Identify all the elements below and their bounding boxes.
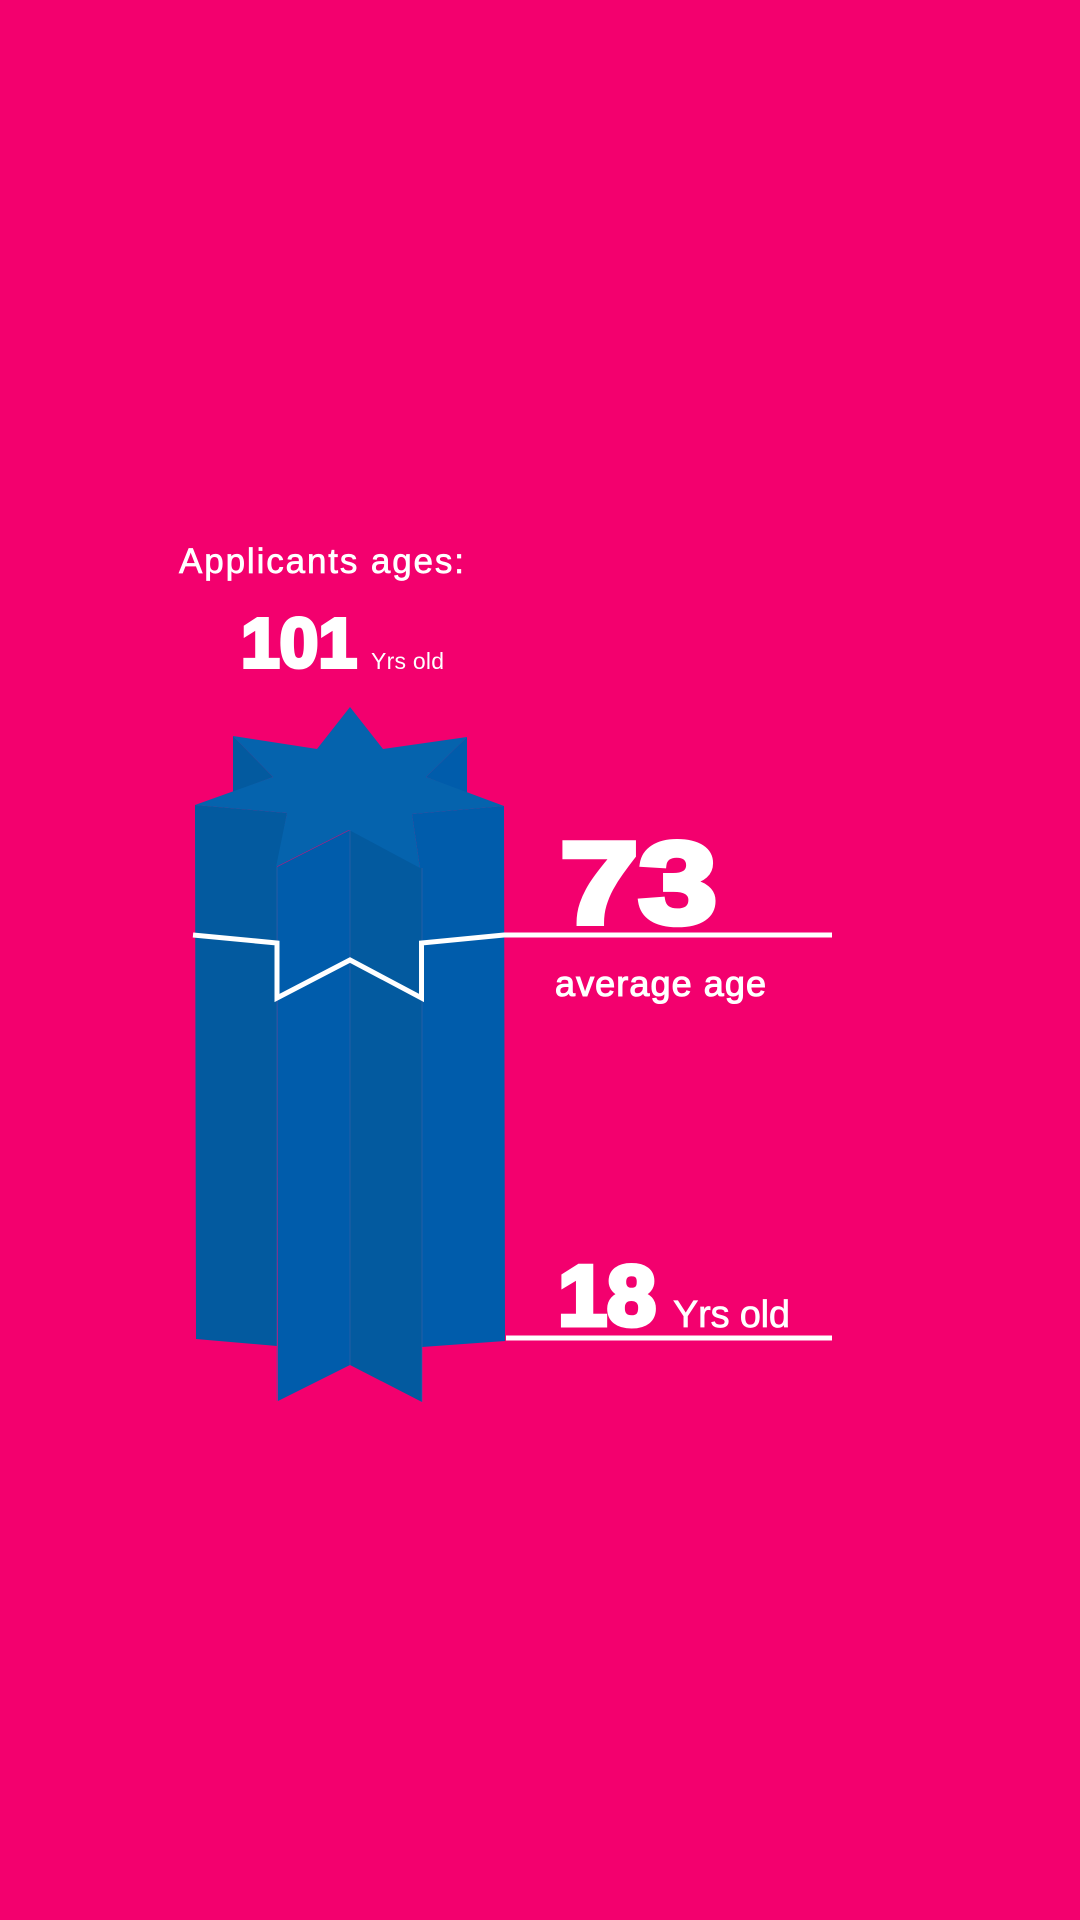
title: Applicants ages: Applicants ages:: [179, 542, 464, 581]
back point of the star, left: [233, 736, 273, 792]
minimum age marker line: [506, 1336, 832, 1340]
maximum age: 101 Yrs old: 101: [241, 604, 357, 682]
average value: 73: 73: [560, 818, 717, 948]
average age label: average age: [555, 963, 766, 1004]
column face, far left: [195, 805, 287, 1346]
minimum age: 18 Yrs old: 18: [558, 1249, 656, 1344]
star top face: [195, 707, 504, 868]
average age marker line: [193, 935, 832, 998]
maximum age: 101 Yrs old: [241, 604, 444, 682]
column face, centre left: [277, 830, 350, 1401]
maximum age: 101 Yrs old: Yrs old: [371, 648, 444, 674]
back point of the star, right: [426, 737, 467, 793]
minimum age: 18 Yrs old: [558, 1249, 790, 1344]
column face, centre right: [350, 830, 422, 1402]
minimum age: 18 Yrs old: Yrs old: [673, 1294, 790, 1336]
column face, far right: [412, 806, 505, 1347]
star-shaped column chart: [195, 707, 505, 1402]
